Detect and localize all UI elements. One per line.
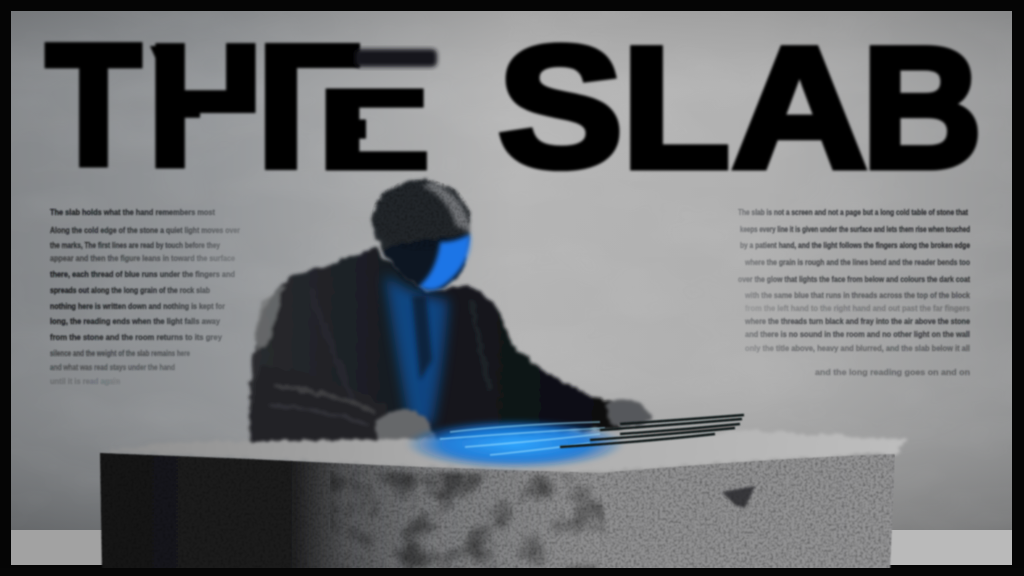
glowing blue lines on slab [405,415,744,469]
left text block: long, the reading ends when the light falls away [50,316,220,326]
title word: SLAB: B [862,12,982,204]
figure: man leaning over slab [249,179,652,448]
title: THE SLAB [42,40,980,173]
left text block: from the stone and the room returns to its grey [50,332,222,342]
head [372,179,471,291]
left text block: appear and then the figure leans in toward the surface [50,253,235,263]
right text block: and the long reading goes on and on [815,368,970,377]
right text block: by a patient hand, and the light follows the fingers along the broken edge [740,241,970,250]
left text block: Along the cold edge of the stone a quiet light moves over [50,225,241,235]
slab crack [722,486,755,508]
title word: SLAB: L [622,12,730,204]
slab front face [100,453,895,572]
title word: SLAB: S [498,11,623,203]
right text block: only the title above, heavy and blurred, and the slab below it all [745,344,970,353]
left text block: there, each thread of blue runs under the fingers and [50,269,235,279]
title word: THE [42,40,429,172]
right text block: where the threads turn black and fray into the air above the stone [744,317,970,326]
title word: THE: H [148,10,263,202]
title word: SLAB: A [732,12,867,204]
left text block: the marks, The first lines are read by touch before they [50,240,220,250]
title word: SLAB [498,11,982,204]
near hand [376,409,438,447]
right text block [738,208,971,377]
right text block: where the grain is rough and the lines bend and the reader bends too [744,258,970,267]
title word: THE: E [320,69,428,191]
blue shirt glow [385,275,448,425]
left text block [50,207,241,386]
right text block: from the left hand to the right hand and out past the far fingers [745,304,971,313]
lit face [419,234,470,290]
far hand [606,399,652,426]
left text block: silence and the weight of the slab remains here [50,348,190,358]
left text block: spreads out along the long grain of the rock slab [50,285,210,295]
right text block: and there is no sound in the room and no other light on the wall [745,330,970,339]
tie [412,296,432,380]
left text block: until it is read again [50,376,120,386]
left text block: nothing here is written down and nothing is kept for [50,301,226,311]
left text block: and what was read stays under the hand [50,362,175,372]
left text block: The slab holds what the hand remembers most [50,207,215,217]
right text block: over the glow that lights the face from below and colours the dark coat [738,275,970,284]
right text block: The slab is not a screen and not a page but a long cold table of stone that [738,208,968,217]
title word: THE: T [46,9,141,201]
jacket [249,248,622,448]
stone slab [100,430,908,572]
slab top surface [100,430,908,472]
bottom black strip [0,568,1024,576]
dark threads [560,415,744,447]
right text block: with the same blue that runs in threads across the top of the block [744,291,970,300]
title ghost bar [355,49,437,67]
floor bands [11,530,1012,565]
